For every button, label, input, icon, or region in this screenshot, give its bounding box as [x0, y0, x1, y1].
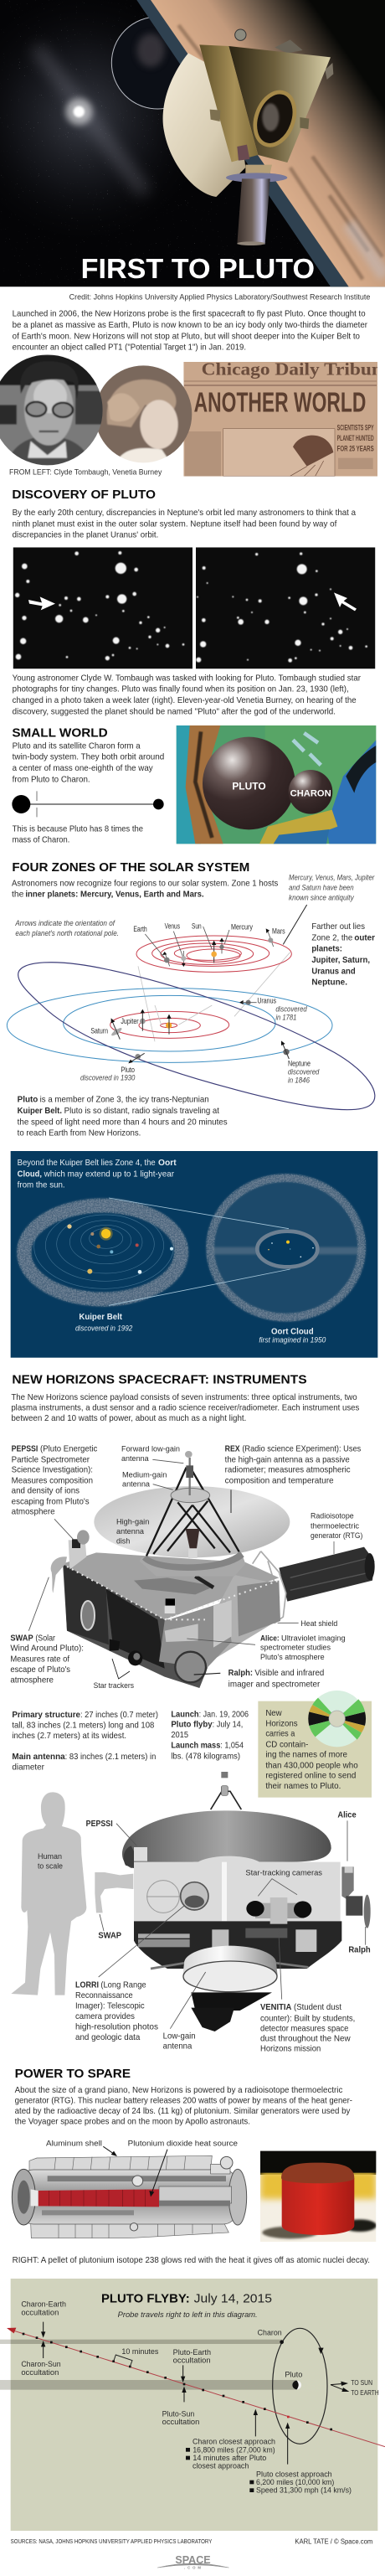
spacecraft specifications: tall, 83 inches (2.1 meters) long and 108: [12, 1721, 155, 1730]
four zones text: inner planets: Mercury, Venus, Earth and Mars.: [25, 891, 204, 900]
Tombaugh text: Young astronomer Clyde W. Tombaugh was tasked with looking for Pluto. Tombaugh studied star: [13, 674, 362, 683]
arrows note: each planet's north rotational pole.: [15, 929, 119, 937]
Oort text: from the sun.: [18, 1181, 65, 1190]
discovery text: ninth planet must exist in the outer solar system. Neptune itself had been found by way of: [13, 519, 336, 529]
flyby labels: Pluto-Earth: [173, 2348, 211, 2357]
flyby labels: 10 minutes: [121, 2347, 159, 2356]
shadow bands: [0, 2340, 296, 2390]
label: LORRI: Imager): Telescopic: [75, 2001, 145, 2011]
flyby title: July 14, 2015: [194, 2291, 272, 2305]
label: PEPSSI: Particle Spectrometer: [12, 1455, 90, 1464]
Oort text: which may extend up to 1 light-year: [44, 1169, 175, 1179]
center of mass diagram: [12, 791, 164, 817]
arrows note: [14, 919, 119, 937]
image credit: Credit: Johns Hopkins University Applied Physics Laboratory/Southwest Research Institute: [69, 292, 370, 301]
pellet caption: RIGHT: A pellet of plutonium isotope 238 glows red with the heat it gives off as atomic nuclei decay.: [13, 2256, 370, 2265]
logo: Space.com: .COM: [184, 2566, 201, 2570]
antiquity note: [289, 874, 375, 902]
label: PEPSSI: PEPSSI: [12, 1445, 38, 1454]
arrows note: Arrows indicate the orientation of: [14, 919, 116, 927]
small world text: [13, 741, 165, 784]
spacecraft side labels: Ralph: [348, 1946, 371, 1955]
zone 2 text: [311, 922, 375, 988]
label: Alice: [187, 1634, 346, 1661]
zone 2 text: outer: [354, 933, 375, 942]
launch facts: : Jan. 19, 2006: [199, 1710, 249, 1719]
discovery text: By the early 20th century, discrepancies in Neptune's orbit led many astronomers to think that a: [13, 508, 356, 518]
label: PEPSSI: escaping from Pluto's: [12, 1497, 90, 1506]
spacecraft side labels: Star-tracking cameras: [245, 1868, 322, 1877]
power text: ated by the radioactive decay of 24 lbs. (11 kg) of plutonium. Similar generators were used by: [15, 2107, 351, 2116]
Pluto Kuiper belt text: Pluto: [18, 1096, 38, 1105]
Pluto marker: [292, 2381, 301, 2389]
label: VENITIA: (Student dust: [294, 2003, 341, 2012]
small world text: twin-body system. They both orbit around: [13, 753, 165, 762]
intro text block: encounter an object called PT1 ("Potential Target 1") in Jan. 2019.: [13, 343, 246, 353]
logo: Space.com: [157, 2553, 228, 2570]
label: medium-gain antenna: Medium-gain: [122, 1470, 167, 1479]
inner solar system orbits: [136, 927, 291, 1041]
spacecraft specifications: [12, 1711, 158, 1772]
mass text: mass of Charon.: [13, 836, 69, 845]
byline: KARL TATE / © Space.com: [295, 2537, 372, 2546]
label: LORRI: [75, 1981, 158, 2042]
label: Alice: Alice:: [260, 1634, 280, 1642]
human to scale silhouette: to scale: [38, 1862, 63, 1871]
spacecraft specifications: diameter: [12, 1763, 45, 1772]
spacecraft base: [191, 2008, 234, 2031]
label: high-gain antenna dish: [116, 1518, 149, 1545]
Tombaugh text: changed in a photo taken a week later (right). Eleven-year-old Venetia Burney, on hearing of the: [13, 696, 357, 705]
Pluto closest approach: 6,200 miles (10,000 km): [256, 2478, 334, 2486]
flyby labels: Pluto-Sun: [162, 2409, 194, 2418]
label: low-gain antenna: Low-gain: [163, 2031, 196, 2041]
instruments text: [11, 1393, 359, 1423]
spacecraft illustration, top view: [51, 1451, 375, 1688]
portrait: Venetia Burney: [95, 364, 192, 467]
occultation arrows: [41, 2322, 290, 2465]
portrait: Clyde Tombaugh: [0, 354, 103, 467]
Pluto closest approach: [249, 2470, 352, 2495]
title: FIRST TO PLUTO: [81, 254, 315, 285]
discovery text: discrepancies in the planet Uranus' orbit.: [13, 531, 158, 540]
spacecraft specifications: inches (2.7 meters) at its widest.: [12, 1732, 126, 1741]
outer planet labels: [80, 1004, 320, 1085]
label: low-gain antenna: antenna: [163, 2042, 192, 2051]
human to scale silhouette: Human: [38, 1852, 62, 1861]
label: PEPSSI: [12, 1445, 97, 1539]
label: RTG: thermoelectric: [311, 1521, 359, 1530]
heading: power to spare: POWER TO SPARE: [15, 2068, 131, 2081]
label: RTG: Radioisotope: [311, 1512, 354, 1520]
callout: names on CD: [258, 1691, 372, 1798]
RTG cutaway diagram: [12, 2155, 247, 2238]
sources: SOURCES: NASA, JOHNS HOPKINS UNIVERSITY APPLIED PHYSICS LABORATORY: [11, 2539, 213, 2545]
four zones text: Astronomers now recognize four regions to our solar system. Zone 1 hosts: [12, 879, 278, 888]
outer planet labels: Pluto: [121, 1066, 135, 1074]
spacecraft side labels: PEPSSI: [86, 1820, 113, 1829]
map with Pluto and Charon to scale: CHARON: [290, 789, 331, 799]
label: Ralph: [194, 1669, 324, 1690]
inner planet labels: Venus: [165, 922, 180, 931]
newspaper clipping: Chicago Daily Tribune: [202, 360, 385, 379]
instruments text: plasma instruments, a dust sensor and a radio science receiver/radiometer. Each instrument uses: [11, 1403, 359, 1412]
small world text: from Pluto to Charon.: [13, 775, 90, 784]
star photograph: Jan 23 1930: [13, 547, 192, 669]
Pluto Kuiper belt text: Kuiper Belt.: [18, 1107, 62, 1116]
launch facts: Pluto flyby: [171, 1721, 213, 1730]
label: REX: the high-gain antenna as a passive: [225, 1455, 350, 1464]
heading: instruments: NEW HORIZONS SPACECRAFT: INSTRUMENTS: [12, 1374, 307, 1387]
flyby labels: occultation: [21, 2368, 59, 2377]
inner planet labels: Sun: [192, 922, 202, 931]
label: PEPSSI: atmosphere: [12, 1508, 55, 1517]
label: REX: radiometer; measures atmospheric: [225, 1466, 351, 1475]
Pluto closest approach: Speed 31,300 mph (14 km/s): [256, 2486, 352, 2495]
label: Alice: Pluto's atmosphere: [260, 1653, 325, 1661]
Pluto Kuiper belt text: [18, 1096, 228, 1138]
label: Alice: Ultraviolet imaging: [281, 1634, 346, 1642]
outer planet labels: discovered in 1930: [80, 1073, 135, 1082]
four zones text: [12, 879, 278, 900]
label: Ralph: Visible and infrared: [254, 1669, 324, 1678]
outer planet labels: discovered: [288, 1068, 320, 1076]
label: medium-gain antenna: antenna: [122, 1480, 150, 1489]
flyby title: Probe travels right to left in this diagram.: [118, 2310, 258, 2319]
outer planet labels: Saturn: [90, 1026, 108, 1035]
map with Pluto and Charon to scale: [177, 725, 376, 844]
launch facts: [171, 1710, 249, 1761]
label: SWAP: atmosphere: [10, 1675, 54, 1685]
spacecraft side labels: [86, 1810, 371, 2029]
instruments text: The New Horizons science payload consists of seven instruments: three optical instruments, two: [11, 1393, 357, 1402]
label: PEPSSI: (Pluto Energetic: [40, 1445, 97, 1454]
Oort cloud diagram: Oort Cloud: [271, 1328, 314, 1337]
outer orbits: [7, 963, 375, 1110]
pointer from note to orbit: [283, 905, 307, 944]
RTG labels: [46, 2139, 238, 2197]
Tombaugh text: [13, 674, 362, 716]
label: REX: composition and temperature: [225, 1476, 334, 1485]
trajectory: [7, 2328, 385, 2447]
Oort cloud diagram: first imagined in 1950: [259, 1336, 326, 1345]
label: SWAP: (Solar: [35, 1634, 55, 1643]
outer planet labels: in 1846: [288, 1076, 310, 1085]
spacecraft side labels: SWAP: [98, 1932, 122, 1941]
label: LORRI: and geologic data: [75, 2033, 141, 2042]
launch facts: 2015: [171, 1731, 188, 1740]
mass text: This is because Pluto has 8 times the: [13, 824, 143, 834]
antiquity note: known since antiquity: [289, 894, 354, 902]
spacecraft specifications: Primary structure: [12, 1711, 80, 1720]
label: SWAP: Measures rate of: [10, 1655, 69, 1664]
label: star trackers: [94, 1659, 134, 1690]
panel: Pluto flyby: [0, 2279, 385, 2570]
map with Pluto and Charon to scale: PLUTO: [232, 782, 266, 792]
outer planet labels: Jupiter: [121, 1017, 139, 1025]
small world text: Pluto and its satellite Charon form a: [13, 741, 141, 751]
launch facts: Launch mass: [171, 1742, 221, 1751]
label: high-gain antenna dish: dish: [116, 1536, 130, 1545]
Tombaugh text: photographs for tiny changes. Pluto was finally found when its position on Jan. 23, 1930 (left),: [13, 685, 349, 694]
Tombaugh text: discovery, suggested the planet should be named "Pluto" after the god of the underworld.: [13, 707, 336, 716]
label: PEPSSI: Science Investigation):: [12, 1466, 93, 1475]
label: VENITIA: [260, 2003, 355, 2054]
Charon closest approach: Charon closest approach: [192, 2438, 275, 2446]
star photograph: one week later: [196, 547, 375, 669]
label: VENITIA: VENITIA: [260, 2003, 292, 2012]
inner planet labels: [133, 922, 285, 935]
zone 2 text: Farther out lies: [311, 922, 365, 932]
spacecraft side labels: Alice: [337, 1810, 357, 1820]
zone 2 text: Neptune.: [311, 978, 347, 988]
inner planet labels: Mercury: [231, 922, 253, 931]
label: Ralph: imager and spectrometer: [228, 1680, 321, 1690]
Charon closest approach: closest approach: [192, 2462, 249, 2470]
sun and earth direction arrows: [331, 2379, 379, 2397]
zone 2 text: planets:: [311, 945, 342, 954]
power text: the Voyager space probes and on the moon by Apollo astronauts.: [15, 2117, 250, 2126]
Kuiper belt diagram: Kuiper Belt: [79, 1313, 123, 1322]
spacecraft illustration, side view: [95, 1772, 371, 2011]
zoom lines between diagrams: [109, 1198, 290, 1305]
label: LORRI: high-resolution photos: [75, 2023, 158, 2032]
intro text block: be a planet as massive as Earth, Pluto is now known to be an icy body only two-thirds the diameter: [13, 321, 368, 330]
label: VENITIA: dust throughout the New: [260, 2035, 351, 2044]
flyby labels: Charon-Sun: [21, 2360, 61, 2368]
label: SWAP: escape of Pluto's: [10, 1665, 70, 1675]
instruments text: between 2 and 10 watts of power, about as much as a night light.: [11, 1414, 246, 1423]
Oort cloud diagram: [210, 1174, 362, 1345]
spacecraft specifications: : 27 inches (0.7 meter): [80, 1711, 158, 1720]
flyby labels: occultation: [162, 2418, 199, 2426]
Pluto Kuiper belt text: the speed of light need more than 4 hours and 20 minutes: [18, 1118, 228, 1127]
launch facts: lbs. (478 kilograms): [171, 1752, 240, 1761]
outer planet labels: discovered: [275, 1004, 308, 1013]
power text: [15, 2086, 352, 2126]
callout: names on CD: registered online to send: [265, 1772, 357, 1781]
outer planet labels: Neptune: [288, 1060, 311, 1068]
label: Ralph: Ralph:: [228, 1669, 253, 1678]
icon: CD: [308, 1691, 366, 1747]
intro text block: Launched in 2006, the New Horizons probe is the first spacecraft to fly past Pluto. Once thought to: [13, 310, 366, 319]
label: SWAP: [10, 1577, 84, 1685]
heading: four zones: FOUR ZONES OF THE SOLAR SYSTEM: [12, 861, 249, 875]
human to scale silhouette: [11, 1792, 86, 1995]
Uranus label: Uranus: [257, 997, 276, 1005]
callout: names on CD: ing the names of more: [265, 1751, 347, 1760]
flyby labels: Pluto: [285, 2370, 302, 2378]
label: star trackers: Star trackers: [94, 1681, 134, 1690]
launch facts: : July 14,: [213, 1721, 243, 1730]
label: LORRI: camera provides: [75, 2012, 135, 2021]
Charon closest approach: [186, 2438, 275, 2470]
inner planet labels: Mars: [272, 927, 285, 935]
label: Alice: spectrometer studies: [260, 1644, 331, 1652]
heading: small world: SMALL WORLD: [12, 726, 108, 740]
power text: generator (RTG). This nuclear battery releases 200 watts of power by means of the heat gener-: [15, 2096, 352, 2105]
heading: discovery of Pluto: DISCOVERY OF PLUTO: [12, 488, 156, 502]
mass text: [13, 824, 143, 845]
antiquity note: and Saturn have been: [289, 884, 354, 892]
label: REX: (Radio science EXperiment): Uses: [242, 1445, 361, 1454]
discovery text: [13, 508, 356, 540]
spacecraft specifications: : 83 inches (2.1 meters) in: [65, 1753, 157, 1762]
small world text: a center of mass one-eighth of the way: [13, 764, 153, 773]
Pluto Kuiper belt text: is a member of Zone 3, the icy trans-Neptunian: [40, 1096, 209, 1105]
spacecraft specifications: Main antenna: [12, 1753, 65, 1762]
callout: names on CD: New: [265, 1709, 282, 1718]
Oort text: Oort: [158, 1159, 177, 1168]
RTG labels: Plutonium dioxide heat source: [128, 2139, 238, 2147]
hero illustration: New Horizons probe near Pluto: [0, 0, 385, 287]
flyby labels: occultation: [173, 2357, 211, 2365]
four zones text: the: [12, 891, 24, 900]
label: VENITIA: Horizons mission: [260, 2045, 321, 2054]
flyby labels: occultation: [21, 2308, 59, 2316]
Pluto closest approach: Pluto closest approach: [256, 2470, 332, 2478]
label: LORRI: Reconnaissance: [75, 1991, 133, 2000]
Pluto Kuiper belt text: Pluto is so distant, radio signals traveling at: [64, 1107, 219, 1116]
Pluto Kuiper belt text: to reach Earth from New Horizons.: [18, 1129, 141, 1138]
callout: names on CD: CD contain-: [265, 1740, 308, 1749]
label: medium-gain antenna: [122, 1470, 173, 1489]
RTG labels: Aluminum shell: [46, 2139, 102, 2147]
label: forward low-gain antenna: antenna: [121, 1454, 149, 1463]
Oort text: [18, 1159, 177, 1190]
zone 2 text: Jupiter, Saturn,: [311, 956, 370, 965]
Charon closest approach: 16,800 miles (27,000 km): [192, 2445, 275, 2454]
sun and earth direction arrows: TO SUN: [351, 2379, 372, 2387]
label: SWAP: Wind Around Pluto):: [10, 1644, 84, 1654]
portrait caption: FROM LEFT: Clyde Tombaugh, Venetia Burney: [9, 468, 162, 477]
zone 2 text: Zone 2, the: [311, 933, 353, 942]
Kuiper belt diagram: [24, 1205, 182, 1332]
label: REX: [225, 1445, 361, 1513]
callout: names on CD: carries a: [265, 1730, 295, 1739]
label: high-gain antenna dish: antenna: [116, 1527, 144, 1536]
label: heat shield: [278, 1619, 337, 1628]
callout: names on CD: Horizons: [265, 1719, 298, 1728]
callout: names on CD: their names to Pluto.: [265, 1782, 341, 1791]
intro text block: [13, 310, 368, 353]
label: VENITIA: detector measures space: [260, 2024, 349, 2033]
label: LORRI: LORRI: [75, 1981, 99, 1990]
power text: About the size of a grand piano, New Horizons is powered by a radioisotope thermoelectric: [15, 2086, 342, 2095]
outer planet labels: in 1781: [275, 1013, 296, 1021]
flyby labels: Charon-Earth: [21, 2300, 66, 2308]
sun and earth direction arrows: TO EARTH: [351, 2389, 379, 2397]
label: VENITIA: counter): Built by students,: [260, 2014, 355, 2023]
launch facts: Launch: [171, 1710, 199, 1719]
flyby labels: [21, 2300, 302, 2426]
flyby title: [101, 2291, 272, 2319]
zone 2 text: Uranus and: [311, 967, 356, 976]
Charon orbit: [273, 2328, 327, 2444]
logo: Space.com: SPACE: [175, 2553, 211, 2566]
label: heat shield: Heat shield: [300, 1619, 337, 1628]
label: PEPSSI: Measures composition: [12, 1476, 93, 1485]
Oort text: Beyond the Kuiper Belt lies Zone 4, the: [18, 1159, 156, 1168]
label: REX: REX: [225, 1445, 240, 1454]
label: forward low-gain antenna: Forward low-gain: [121, 1445, 180, 1453]
inner planet labels: Earth: [133, 925, 147, 933]
label: forward low-gain antenna: [121, 1445, 183, 1464]
label: LORRI: (Long Range: [100, 1981, 146, 1990]
Oort text: Cloud,: [18, 1169, 42, 1179]
flyby title: PLUTO FLYBY:: [101, 2291, 190, 2305]
label: PEPSSI: and density of ions: [12, 1487, 80, 1496]
label: low-gain antenna: [163, 2031, 196, 2051]
Charon closest approach: 14 minutes after Pluto: [192, 2454, 266, 2462]
label: RTG: generator (RTG): [311, 1531, 362, 1540]
panel: Oort cloud: [11, 1151, 377, 1358]
Kuiper belt diagram: discovered in 1992: [75, 1324, 132, 1332]
label: RTG: [311, 1512, 362, 1554]
intro text block: of Earth's moon. New Horizons will not stop at Pluto, but will shoot deeper into the Kuiper Belt to: [13, 332, 360, 341]
flyby labels: Charon: [258, 2329, 282, 2337]
label: high-gain antenna dish: High-gain: [116, 1518, 149, 1526]
photo: glowing plutonium pellet: [260, 2151, 377, 2242]
launch facts: : 1,054: [220, 1742, 244, 1751]
callout: names on CD: than 430,000 people who: [265, 1761, 358, 1770]
newspaper clipping: [183, 360, 385, 477]
label: SWAP: SWAP: [10, 1634, 33, 1643]
